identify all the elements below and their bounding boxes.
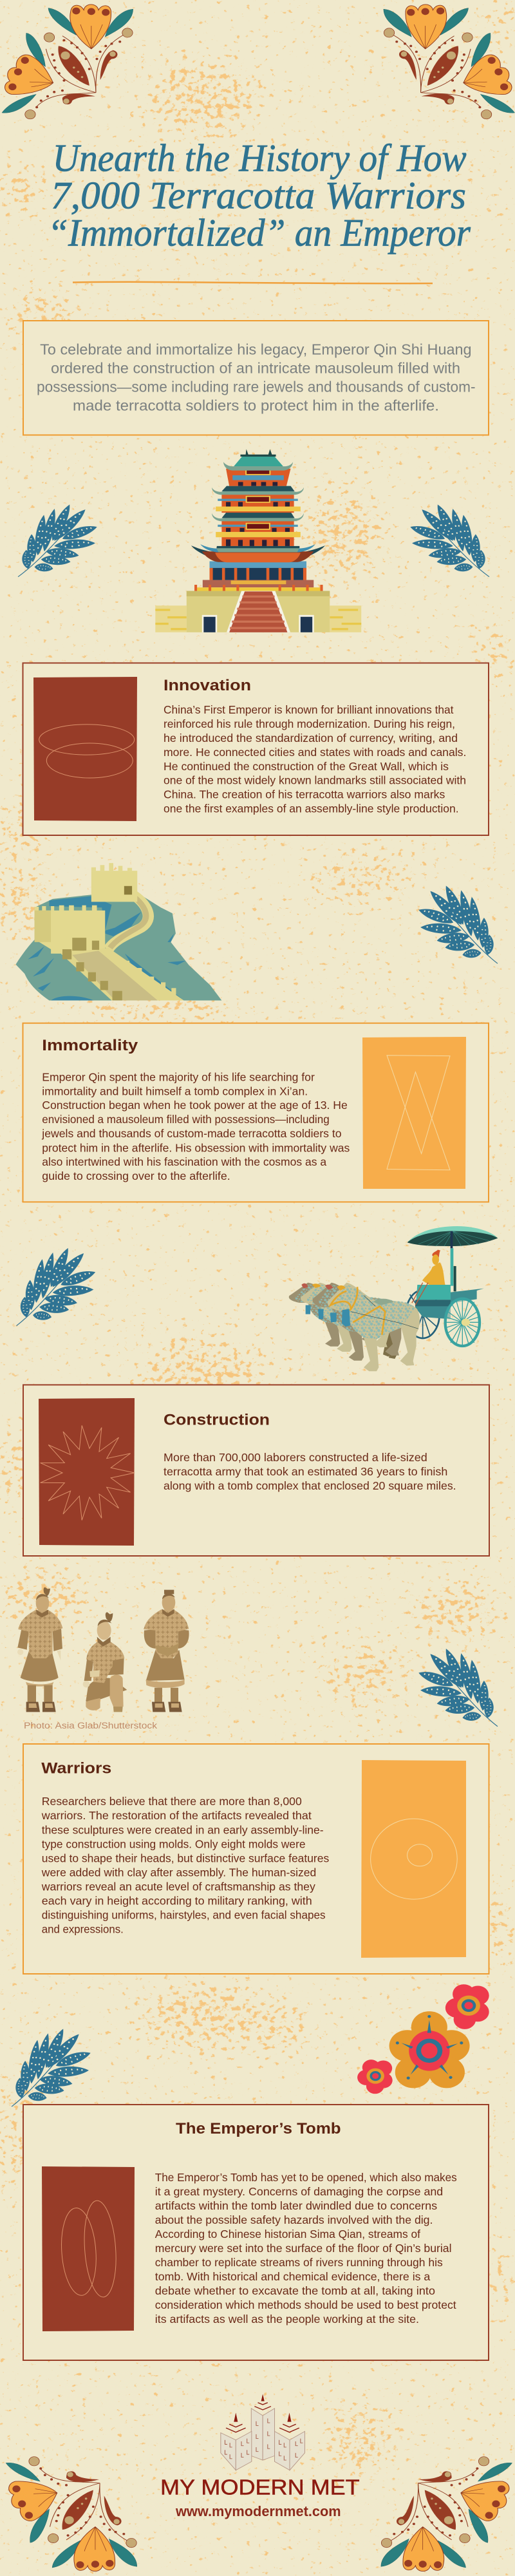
icon: leaf left of pagoda — [18, 503, 99, 577]
body: tomb: tomb. With historical and chemical evidence, there is a — [155, 2270, 431, 2283]
body: warriors: these sculptures were created in an early assembly-line- — [42, 1823, 324, 1836]
icon: leaf beside great wall — [417, 884, 498, 963]
illustration: pagoda — [155, 449, 361, 632]
decorative flower: top right — [384, 5, 514, 119]
body: tomb: artifacts within the tomb later dwindled due to concerns — [155, 2199, 437, 2212]
illustration: great wall — [15, 863, 221, 1000]
title: Unearth the History of How — [53, 137, 467, 180]
image block: construction — [39, 1398, 135, 1546]
body: tomb: chamber to replicate streams of rivers running through his — [155, 2256, 443, 2269]
body: warriors: warriors reveal an acute level of craftsmanship as they — [41, 1880, 315, 1893]
heading: innovation: Innovation — [164, 677, 251, 694]
intro text: possessions—some including rare jewels and thousands of custom- — [37, 379, 476, 395]
panel: immortality — [23, 1023, 489, 1202]
body: innovation: one of the most widely known landmarks still associated with — [164, 774, 466, 787]
panel: intro — [23, 321, 489, 435]
body: tomb: The Emperor’s Tomb has yet to be opened, which also makes — [155, 2171, 457, 2184]
icon: leaf beside warriors — [417, 1647, 498, 1727]
illustration: terracotta warriors — [17, 1587, 189, 1712]
icon: leaf beside chariot — [17, 1246, 97, 1326]
flower: small bottom left — [357, 2060, 393, 2094]
body: innovation — [164, 703, 466, 815]
body: immortality: immortality and built himself a tomb complex in Xi’an. — [42, 1084, 308, 1097]
flower: small top right — [445, 1984, 489, 2029]
image block: warriors — [361, 1760, 466, 1958]
body: innovation: more. He connected cities and states with roads and canals. — [164, 746, 466, 759]
flower: large orange — [389, 2011, 470, 2088]
title: 7,000 Terracotta Warriors — [51, 175, 466, 217]
body: tomb: about the possible safety hazards involved with the dig. — [155, 2213, 433, 2226]
warrior: kneeling — [83, 1612, 127, 1712]
panel: warriors — [23, 1744, 489, 1974]
intro text: ordered the construction of an intricate mausoleum filled with — [51, 359, 460, 376]
body: warriors: each vary in height according to military ranking, with — [42, 1895, 312, 1908]
body: immortality: jewels and thousands of custom-made terracotta soldiers to — [41, 1127, 342, 1140]
panel: the emperor's tomb — [23, 2105, 489, 2360]
body: construction — [164, 1451, 456, 1492]
body: construction: terracotta army that took an estimated 36 years to finish — [164, 1465, 447, 1478]
body: warriors: distinguishing uniforms, hairstyles, and even facial shapes — [42, 1908, 326, 1921]
image block: immortality — [362, 1037, 466, 1189]
body: innovation: he introduced the standardization of currency, writing, and — [164, 732, 458, 744]
body: warriors: type construction using molds. Only eight molds were — [42, 1838, 306, 1851]
heading: immortality: Immortality — [42, 1037, 138, 1054]
body: tomb: According to Chinese historian Sima Qian, streams of — [155, 2228, 420, 2240]
body: innovation: He continued the construction of the Great Wall, which is — [164, 760, 449, 773]
body: tomb — [155, 2171, 457, 2325]
body: warriors — [41, 1795, 329, 1935]
decorative flower: top left — [2, 5, 133, 119]
body: warriors: used to shape their heads, but distinctive surface features — [42, 1852, 329, 1865]
intro text — [37, 341, 476, 413]
panel: construction — [23, 1385, 489, 1556]
illustration: chariot and horses — [289, 1226, 498, 1371]
image block: tomb — [42, 2166, 135, 2331]
body: construction: More than 700,000 laborers constructed a life-sized — [164, 1451, 427, 1464]
heading: tomb: The Emperor’s Tomb — [176, 2120, 341, 2137]
body: innovation: reinforced his rule through modernization. During his reign, — [164, 717, 455, 730]
body: innovation: China’s First Emperor is known for brilliant innovations that — [164, 703, 454, 716]
body: warriors: were added with clay after assembly. The human-sized — [41, 1866, 316, 1879]
icon: leaf right of pagoda — [408, 503, 489, 577]
icon: leaf beside flowers — [12, 2027, 93, 2107]
logo wordmark: MY MODERN MET — [160, 2476, 360, 2499]
logo url: www.mymodernmet.com — [175, 2503, 341, 2519]
body: warriors: and expressions. — [42, 1922, 124, 1935]
body: warriors: warriors. The restoration of the artifacts revealed that — [41, 1809, 312, 1822]
illustration: flower cluster — [357, 1984, 489, 2094]
body: tomb: its artifacts as well as the people working at the site. — [155, 2313, 419, 2325]
body: tomb: consideration which methods should be used to best protect — [155, 2298, 456, 2311]
body: innovation: China. The creation of his terracotta warriors also marks — [164, 788, 445, 801]
warrior: standing left — [17, 1587, 62, 1712]
heading: construction: Construction — [164, 1412, 270, 1428]
body: tomb: debate whether to excavate the tomb at all, taking into — [155, 2284, 435, 2297]
body: immortality: protect him in the afterlife. His obsession with immortality was — [42, 1141, 350, 1154]
body: tomb: it a great mystery. Concerns of damaging the corpse and — [155, 2185, 443, 2198]
photo credit: Photo: Asia Glab/Shutterstock — [24, 1721, 157, 1730]
body: immortality: also intertwined with his fascination with the cosmos as a — [42, 1155, 326, 1168]
title: “Immortalized” an Emperor — [48, 212, 471, 254]
body: immortality: guide to crossing over to the afterlife. — [42, 1170, 230, 1182]
warrior: standing right — [144, 1590, 189, 1712]
intro text: made terracotta soldiers to protect him in the afterlife. — [73, 397, 439, 413]
panel: innovation — [23, 663, 489, 835]
body: immortality: Emperor Qin spent the majority of his life searching for — [42, 1070, 315, 1083]
logo icon: buildings — [221, 2394, 304, 2470]
decorative flower: bottom left — [6, 2457, 137, 2571]
body: immortality — [41, 1070, 350, 1182]
intro text: To celebrate and immortalize his legacy, Emperor Qin Shi Huang — [40, 341, 472, 357]
body: innovation: one the first examples of an assembly-line style production. — [164, 802, 459, 815]
body: immortality: Construction began when he took power at the age of 13. He — [42, 1099, 348, 1112]
heading: warriors: Warriors — [41, 1760, 111, 1777]
body: warriors: Researchers believe that there are more than 8,000 — [42, 1795, 302, 1808]
body: construction: along with a tomb complex that enclosed 20 square miles. — [164, 1479, 456, 1492]
body: immortality: envisioned a mausoleum filled with possessions—including — [42, 1113, 330, 1126]
logo: my modern met — [160, 2394, 360, 2519]
title — [48, 137, 471, 254]
body: tomb: mercury were set into the surface of the floor of Qin’s burial — [155, 2242, 452, 2255]
image block: innovation — [33, 677, 137, 821]
decorative flower: bottom right — [381, 2457, 512, 2571]
